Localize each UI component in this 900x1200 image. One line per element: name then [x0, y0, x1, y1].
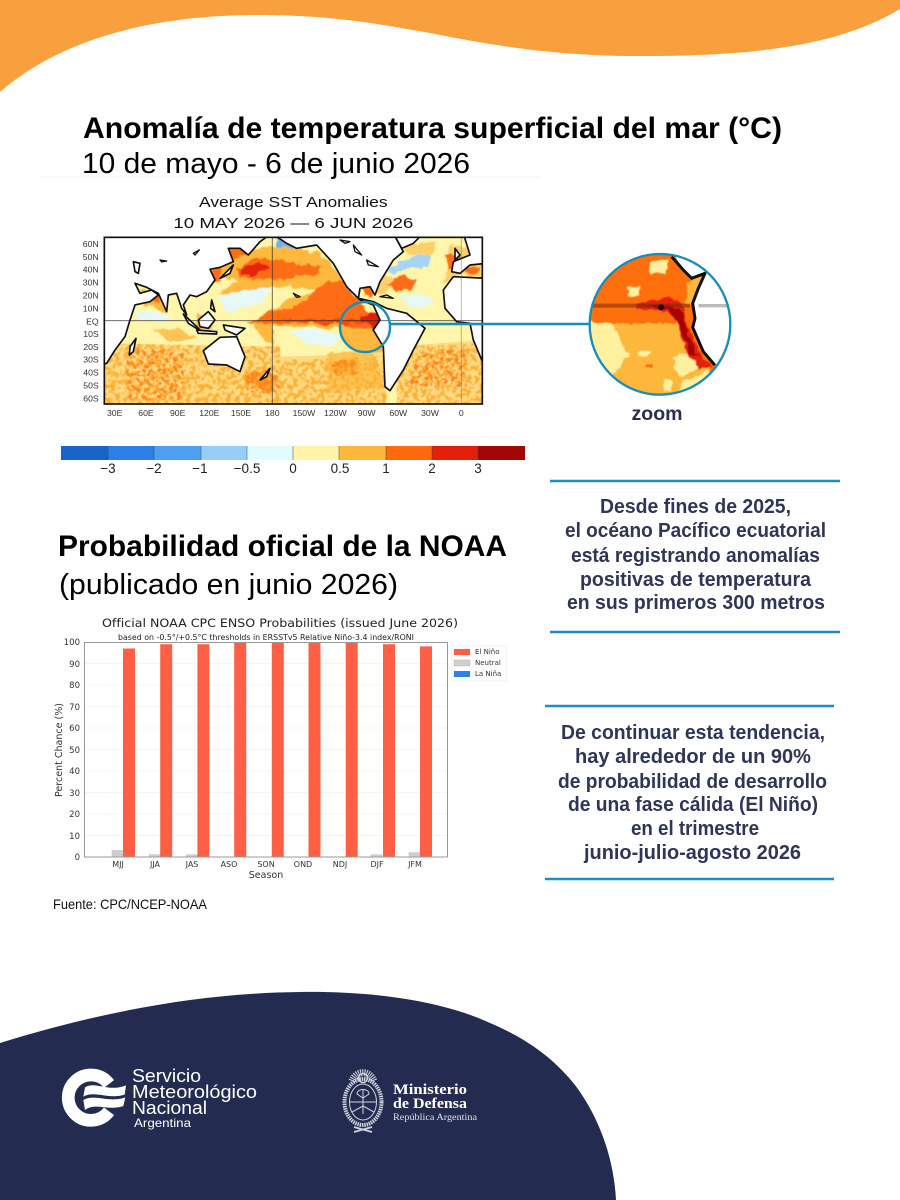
logo: Ministerio de Defensa [344, 1073, 477, 1132]
y axis labels: 0 [75, 853, 80, 863]
zoom circle [588, 252, 732, 396]
equator and meridian lines [104, 237, 482, 404]
text block: El Niño probability: De continuar esta tendencia, [561, 721, 825, 744]
longitude labels: 30W [421, 408, 440, 418]
colour scale: 0.5 [331, 461, 349, 476]
El Niño bars [123, 642, 432, 857]
latitude labels: 20S [83, 342, 99, 352]
text block: El Niño probability: junio-julio-agosto 2026 [583, 841, 801, 864]
text block: ocean anomalies [550, 481, 840, 632]
colour scale: −1 [192, 461, 208, 476]
y axis labels: 30 [69, 789, 80, 799]
text block: ocean anomalies: en sus primeros 300 metros [567, 591, 825, 614]
longitude labels: 90W [358, 408, 376, 418]
icon: SMN ring and waves [68, 1075, 126, 1120]
latitude labels: 30N [83, 278, 99, 288]
colour scale: −3 [100, 461, 116, 476]
colour scale: −2 [146, 461, 162, 476]
warm +0.5 regions [217, 247, 377, 330]
warm +1 regions [237, 258, 323, 280]
latitude labels: 50N [83, 252, 99, 262]
x axis labels: JAS [185, 860, 198, 869]
longitude labels: 180 [265, 408, 280, 418]
text block: El Niño probability: de probabilidad de desarrollo [558, 770, 827, 793]
colour scale: −0.5 [234, 461, 260, 476]
map heading: Average SST Anomalies [199, 195, 388, 211]
latitude labels: EQ [86, 316, 99, 326]
chart legend: El Niño [475, 648, 500, 656]
callout: small circle, connector [340, 302, 592, 352]
longitude labels: 60E [138, 408, 154, 418]
text block: ocean anomalies: está registrando anomalías [571, 544, 820, 567]
y axis labels: 50 [69, 746, 80, 756]
x axis labels: MJJ [112, 860, 124, 869]
chart legend [452, 646, 506, 681]
x axis labels: SON [257, 860, 275, 869]
text block: El Niño probability [545, 706, 834, 879]
logo: Servicio Meteorológico Nacional [68, 1065, 257, 1130]
neutral bars [112, 850, 420, 857]
latitude labels: 40N [83, 265, 99, 275]
x axis labels: ASO [221, 860, 237, 869]
text block: El Niño probability: hay alrededor de un 90% [575, 745, 811, 768]
x axis labels [112, 860, 422, 869]
SST anomaly map figure [83, 195, 487, 418]
longitude labels: 120W [324, 408, 347, 418]
latitude labels: 10S [83, 329, 99, 339]
latitude labels [83, 239, 99, 403]
logo: Ministerio de Defensa: de Defensa [393, 1096, 468, 1112]
colour scale [61, 446, 525, 476]
y axis labels: 10 [69, 832, 80, 842]
title: sea surface temperature anomaly: 10 de mayo - 6 de junio 2026 [82, 148, 470, 180]
y axis labels: 40 [69, 767, 80, 777]
colour scale: 1 [382, 461, 390, 476]
icon: national emblem [344, 1073, 382, 1132]
latitude labels: 40S [83, 368, 99, 378]
text block: ocean anomalies: positivas de temperatura [580, 568, 812, 591]
longitude labels: 90E [170, 408, 186, 418]
top orange wave [0, 0, 900, 92]
longitude labels: 30E [107, 408, 123, 418]
logo: Ministerio de Defensa: Ministerio [393, 1082, 467, 1098]
land masses [100, 233, 487, 391]
text block: ocean anomalies: Desde fines de 2025, [600, 495, 791, 518]
latitude labels: 20N [83, 291, 99, 301]
zoom label: zoom [632, 404, 682, 425]
cool patches [133, 287, 437, 347]
latitude labels: 10N [83, 303, 99, 313]
south ocean soft tone [104, 340, 482, 404]
y axis labels: 80 [69, 681, 80, 691]
longitude labels: 60W [389, 408, 408, 418]
text block: El Niño probability: en el trimestre [631, 817, 759, 840]
logo: Servicio Meteorológico Nacional: Servicio [132, 1065, 201, 1086]
map heading [173, 195, 413, 232]
map heading: 10 MAY 2026 — 6 JUN 2026 [173, 216, 413, 232]
longitude labels: 120E [199, 408, 220, 418]
y axis labels: 20 [69, 810, 80, 820]
logo: Servicio Meteorológico Nacional: Nacional [132, 1097, 207, 1118]
latitude labels: 50S [83, 380, 99, 390]
chart legend: Neutral [475, 659, 501, 667]
latitude labels: 60N [83, 239, 99, 249]
chart title: Official NOAA CPC ENSO Probabilities (issued June 2026) [102, 616, 458, 630]
longitude labels: 150W [293, 408, 316, 418]
longitude labels: 0 [459, 408, 464, 418]
y axis labels: 90 [69, 660, 80, 670]
colour scale: 2 [428, 461, 436, 476]
x axis labels: OND [294, 860, 312, 869]
latitude labels: 30S [83, 355, 99, 365]
title: sea surface temperature anomaly: Anomalía de temperatura superficial del mar (°C) [83, 112, 782, 145]
text block: El Niño probability: de una fase cálida (El Niño) [568, 793, 818, 816]
logo: Servicio Meteorológico Nacional: Meteorológico [132, 1081, 257, 1102]
bar chart: ENSO probabilities [54, 616, 506, 881]
source note: Fuente: CPC/NCEP-NOAA [53, 896, 208, 912]
axis titles: Season [249, 870, 283, 881]
chart title [102, 616, 458, 642]
longitude labels [107, 408, 464, 418]
logo: Servicio Meteorológico Nacional: Argentina [134, 1116, 191, 1130]
heading: NOAA probability: (publicado en junio 2026) [59, 569, 398, 601]
x axis labels: DJF [370, 860, 384, 869]
heading: NOAA probability: Probabilidad oficial de la NOAA [58, 530, 507, 563]
heading: NOAA probability [58, 530, 507, 601]
y axis labels [64, 638, 80, 863]
world map with anomalies [100, 233, 487, 404]
colour scale: 3 [474, 461, 482, 476]
x axis labels: JJA [149, 860, 161, 869]
chart legend: La Niña [475, 670, 501, 678]
logo: Ministerio de Defensa: República Argentina [393, 1112, 477, 1122]
bar chart: ENSO probabilities: Percent Chance (%) [54, 703, 65, 797]
y axis labels: 70 [69, 703, 80, 713]
colour scale: 0 [289, 461, 297, 476]
warm +2 regions [240, 262, 270, 275]
y axis labels: 100 [64, 638, 80, 648]
x axis labels: NDJ [333, 860, 347, 869]
longitude labels: 150E [231, 408, 251, 418]
x axis labels: JFM [407, 860, 422, 869]
y axis labels: 60 [69, 724, 80, 734]
mottled southern ocean [104, 343, 482, 404]
latitude labels: 60S [83, 393, 99, 403]
chart title: based on -0.5°/+0.5°C thresholds in ERSSTv5 Relative Niño-3.4 index/RONI [118, 633, 414, 642]
title: sea surface temperature anomaly [82, 112, 782, 180]
text block: ocean anomalies: el océano Pacífico ecuatorial [565, 519, 826, 542]
bottom navy wave [0, 992, 616, 1200]
